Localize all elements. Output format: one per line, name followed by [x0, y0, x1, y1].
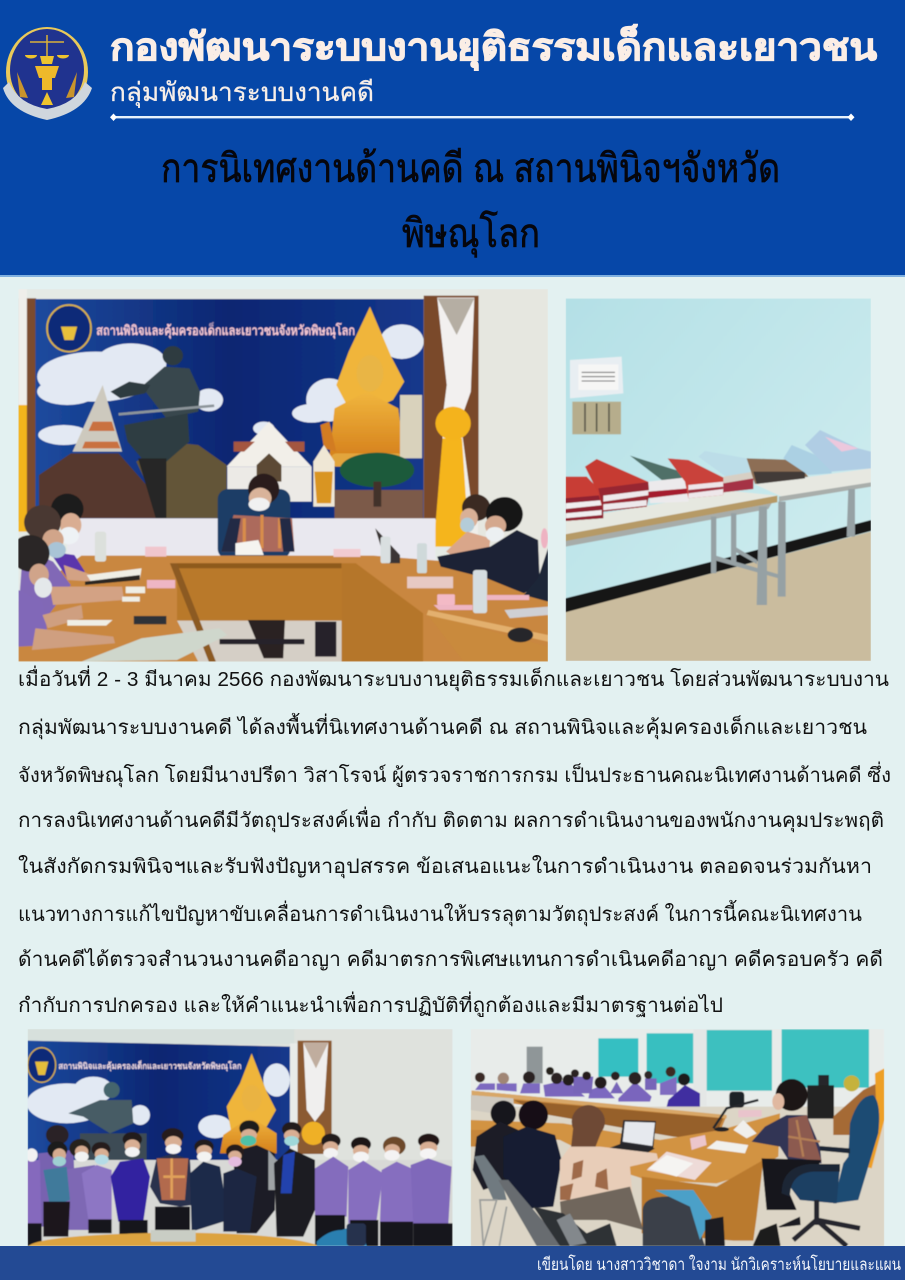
main table	[471, 1113, 780, 1183]
decorative rule	[110, 114, 854, 121]
organisation name: กองพัฒนาระบบงานยุติธรรมเด็กและเยาวชน	[110, 24, 877, 71]
body paragraph: เมื่อวันที่ 2 - 3 มีนาคม 2566 กองพัฒนาระบบงานยุติธรรมเด็กและเยาวชน โดยส่วนพัฒนาระบบงาน	[18, 665, 889, 692]
main heading: การนิเทศงานด้านคดี ณ สถานพินิจฯจังหวัด	[161, 147, 780, 191]
body paragraph: แนวทางการแก้ไขปัญหาขับเคลื่อนการดำเนินงานให้บรรลุตามวัตถุประสงค์ ในการนี้คณะนิเทศงาน	[18, 900, 862, 927]
sub-unit name: กลุ่มพัฒนาระบบงานคดี	[110, 77, 374, 108]
photo: group portrait: สถานพินิจและคุ้มครองเด็กและเยาวชนจังหวัดพิษณุโลก	[58, 1059, 242, 1072]
body paragraph: จังหวัดพิษณุโลก โดยมีนางปรีดา วิสาโรจน์ ผู้ตรวจราชการกรม เป็นประธานคณะนิเทศงานด้านคดี ซึ่ง	[18, 761, 891, 788]
photo: meeting under provincial backdrop	[11, 289, 548, 662]
left attendees	[51, 494, 84, 524]
photo: meeting under provincial backdrop: สถานพินิจและคุ้มครองเด็กและเยาวชนจังหวัดพิษณุโลก	[96, 321, 355, 339]
body paragraph: กำกับการปกครอง และให้คำแนะนำเพื่อการปฏิบัติที่ถูกต้องและมีมาตรฐานต่อไป	[18, 991, 723, 1018]
tables	[566, 491, 776, 534]
long table	[472, 1090, 726, 1128]
body paragraph	[18, 665, 891, 1018]
body paragraph: การลงนิเทศงานด้านคดีมีวัตถุประสงค์เพื่อ กำกับ ติดตาม ผลการดำเนินงานของพนักงานคุมประพฤติ	[18, 806, 884, 833]
footer bar	[0, 1246, 905, 1280]
seated woman in plaid	[776, 1079, 808, 1111]
laptop	[620, 1120, 656, 1148]
body paragraph: ด้านคดีได้ตรวจสำนวนงานคดีอาญา คดีมาตรการพิเศษแทนการดำเนินคดีอาญา คดีครอบครัว คดี	[18, 948, 883, 971]
back row	[475, 1067, 700, 1107]
photo: meeting room wide view	[471, 1029, 884, 1246]
emblem	[3, 27, 92, 120]
person back left	[46, 1125, 69, 1145]
chairs	[474, 1155, 507, 1200]
main heading second line: พิษณุโลก	[402, 211, 540, 258]
logo in backdrop	[47, 305, 91, 352]
stacks of files	[566, 477, 604, 521]
body paragraph: กลุ่มพัฒนาระบบงานคดี ได้ลงพื้นที่นิเทศงานด้านคดี ณ สถานพินิจและคุ้มครองเด็กและเยาวชน	[18, 713, 867, 740]
right attendees	[375, 528, 400, 563]
body paragraph: ในสังกัดกรมพินิจฯและรับฟังปัญหาอุปสรรค ข้อเสนอแนะในการดำเนินงาน ตลอดจนร่วมกันหา	[18, 855, 872, 879]
photo: group portrait	[26, 1029, 453, 1246]
people row	[28, 1160, 453, 1246]
office chair	[833, 1095, 879, 1203]
header banner	[0, 0, 905, 277]
photo: case files stacked on tables	[566, 298, 871, 661]
left seated people	[491, 1101, 516, 1126]
